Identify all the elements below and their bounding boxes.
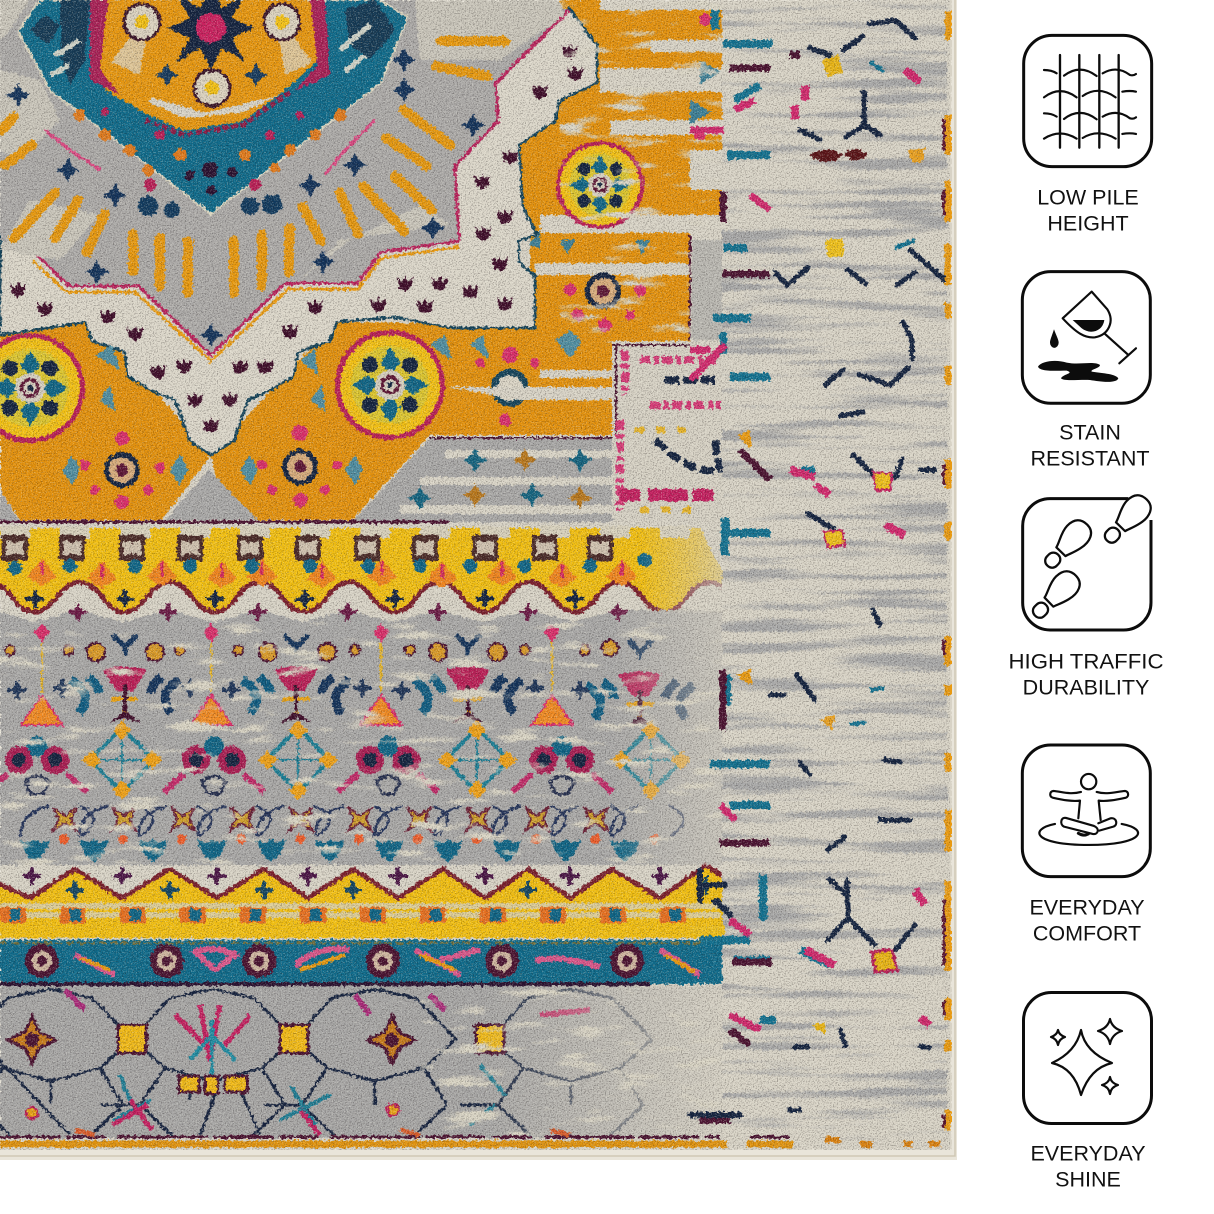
icon: woven pile [1024, 35, 1152, 167]
feature: stain resistant [1022, 272, 1150, 470]
lower zigzag yellow band [0, 865, 740, 938]
lower left orange lobe [0, 322, 211, 520]
rug side binding line [0, 0, 955, 1156]
mottled stripes in lower grey [400, 450, 612, 514]
right field navy lattice [690, 20, 945, 1115]
teal border band [0, 940, 722, 984]
lower mottled ground [0, 438, 612, 522]
wave crosses [26, 590, 627, 621]
right field maroon clusters [700, 55, 800, 1120]
distressed fade layers [0, 0, 722, 1138]
upper right rosette [556, 141, 644, 229]
label: everyday comfort: COMFORT [1033, 922, 1141, 946]
rug backing edge [0, 0, 957, 1160]
icon: seated person [1022, 745, 1150, 877]
side orange block [528, 232, 690, 341]
label: high traffic durability: DURABILITY [1023, 676, 1149, 700]
grey medallion ground [0, 0, 569, 355]
dotted motif row [5, 640, 618, 661]
lower right orange lobe [211, 322, 612, 520]
feature: low pile height [1024, 35, 1152, 235]
lattice field [0, 986, 722, 1138]
base field [0, 0, 952, 1150]
medallion inner orange [90, 0, 330, 135]
right field crimson clusters [690, 70, 930, 1030]
medallion rosettes [0, 330, 445, 443]
label: everyday comfort: EVERYDAY [1029, 896, 1145, 920]
feature: high traffic durability [1008, 490, 1164, 700]
right field yellow accents [690, 55, 925, 1035]
small cross row [8, 679, 589, 699]
figure motif row [71, 635, 694, 728]
label: stain resistant: STAIN [1059, 420, 1121, 444]
bottom border stripe [0, 1130, 940, 1144]
label: stain resistant: RESISTANT [1030, 446, 1150, 470]
pile texture speckle [0, 0, 950, 1150]
pink vines [45, 120, 375, 175]
small x row with teal drops [20, 806, 684, 862]
icon: sparkles [1024, 992, 1152, 1124]
grey ground stars [6, 48, 485, 347]
diamond motif row [82, 720, 691, 800]
grey panel beside orange block [692, 240, 722, 340]
icon: footprints [1023, 490, 1156, 630]
feature: everyday comfort [1022, 745, 1150, 946]
teal medallion [18, 0, 408, 214]
cream stepped band [0, 8, 597, 455]
right field teal clusters [700, 10, 915, 1020]
medallion outline [37, 10, 569, 355]
label: everyday shine: SHINE [1055, 1168, 1121, 1192]
right border stripe [944, 11, 948, 1130]
grey bottom triangles [0, 438, 612, 522]
rug woven pattern [0, 0, 952, 1150]
upper yellow band [0, 528, 732, 612]
pink distressed block [612, 345, 722, 522]
top cream strip [0, 0, 565, 280]
right plain field with grey stripes [722, 0, 952, 1148]
orange lobe ornaments [62, 330, 612, 509]
grey central field [0, 610, 722, 865]
orange rays [0, 41, 505, 293]
label: high traffic durability: HIGH TRAFFIC [1008, 650, 1164, 674]
crimson flower row [0, 736, 612, 794]
label: low pile height: HEIGHT [1047, 212, 1129, 236]
navy cluster under medallion [138, 194, 282, 218]
label: everyday shine: EVERYDAY [1030, 1142, 1146, 1166]
icon: spilled wine glass [1022, 272, 1150, 403]
upper orange panel [520, 0, 722, 232]
cream band dots [10, 44, 583, 433]
feature: everyday shine [1024, 992, 1152, 1192]
panel: rug photo [0, 0, 957, 1160]
label: low pile height: LOW PILE [1037, 186, 1139, 210]
triangle motif row [21, 624, 573, 725]
